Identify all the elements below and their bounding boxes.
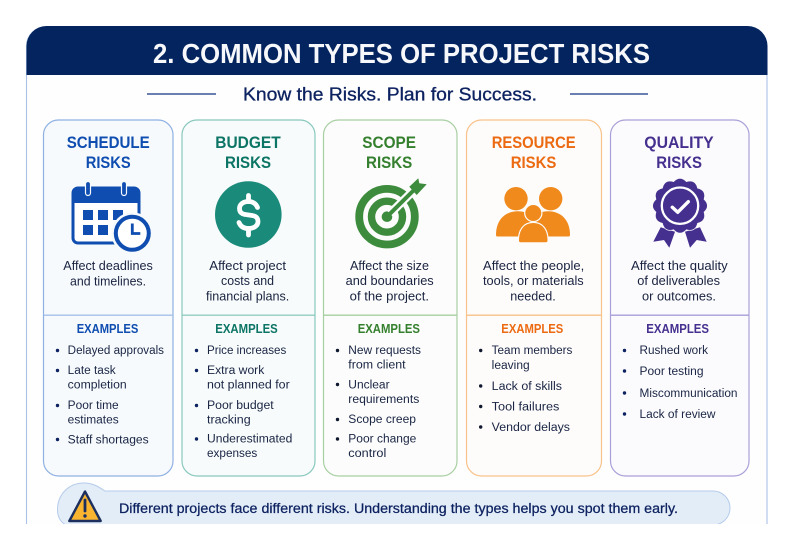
examples list: [479, 345, 573, 434]
description: [63, 259, 153, 289]
icon: calendar with clock: [72, 182, 153, 254]
examples list: Unclear: [348, 380, 390, 392]
examples list: Poor time: [68, 400, 119, 412]
examples list: Price increases: [207, 345, 287, 357]
heading: [362, 133, 416, 172]
description: [483, 259, 584, 304]
examples list: Poor change: [348, 434, 416, 446]
examples list: Miscommunication: [640, 388, 738, 400]
callout text: Different projects face different risks. Understanding the types helps you spot them early.: [119, 501, 678, 516]
panel: budget risks: [182, 120, 315, 476]
heading: RISKS: [225, 153, 271, 172]
panel: scope risks: [324, 120, 457, 476]
panel: resource risks: [466, 120, 602, 476]
description: [631, 259, 728, 304]
heading: [644, 133, 714, 172]
examples list: Vendor delays: [492, 422, 570, 434]
examples list: [56, 345, 164, 446]
examples list: Late task: [68, 365, 116, 377]
examples list: Poor budget: [207, 400, 275, 412]
description: [206, 259, 289, 304]
description: and boundaries: [346, 274, 434, 288]
examples list: [195, 345, 292, 460]
examples heading: EXAMPLES: [646, 322, 709, 336]
examples list: [336, 345, 421, 460]
description: of the project.: [350, 290, 429, 304]
examples list: requirements: [348, 394, 420, 406]
description: needed.: [510, 290, 556, 304]
description: Affect the people,: [483, 259, 584, 273]
description: costs and: [221, 274, 274, 288]
examples list: leaving: [492, 360, 530, 372]
examples list: Underestimated: [207, 434, 292, 446]
description: tools, or materials: [483, 274, 584, 288]
heading: RISKS: [511, 153, 556, 172]
description: financial plans.: [206, 290, 289, 304]
heading: BUDGET: [215, 133, 281, 152]
description: [346, 259, 434, 304]
callout: key takeaway: [58, 483, 730, 525]
heading: [215, 133, 281, 172]
examples list: Tool failures: [492, 401, 560, 413]
icon: dollar coin: [215, 181, 282, 248]
panel: quality risks: [610, 120, 749, 476]
examples list: [623, 345, 738, 421]
examples list: from client: [348, 360, 406, 372]
examples heading: EXAMPLES: [358, 322, 420, 336]
examples list: Scope creep: [348, 414, 416, 426]
heading: SCHEDULE: [67, 133, 150, 152]
heading: QUALITY: [644, 133, 714, 152]
description: and timelines.: [70, 275, 146, 289]
heading: RISKS: [656, 153, 702, 172]
icon: warning triangle: [69, 492, 101, 521]
description: Affect project: [209, 259, 287, 273]
examples heading: EXAMPLES: [77, 322, 138, 336]
icon: people group: [496, 187, 570, 242]
examples list: tracking: [207, 414, 251, 426]
description: Affect the size: [350, 259, 429, 273]
description: Affect deadlines: [63, 259, 153, 273]
examples list: estimates: [68, 414, 119, 426]
heading: RISKS: [86, 153, 131, 172]
examples list: Team members: [492, 345, 573, 357]
heading: SCOPE: [362, 133, 416, 152]
examples list: Lack of skills: [492, 381, 562, 393]
examples heading: EXAMPLES: [501, 322, 563, 336]
examples heading: EXAMPLES: [215, 322, 278, 336]
title banner: [26, 26, 768, 75]
panel: schedule risks: [44, 120, 173, 476]
examples list: Extra work: [207, 365, 265, 377]
examples list: New requests: [348, 345, 421, 357]
tagline text: Know the Risks. Plan for Success.: [243, 84, 537, 104]
description: Affect the quality: [631, 259, 728, 273]
examples list: control: [348, 448, 386, 460]
heading: [67, 133, 150, 172]
examples list: completion: [68, 380, 127, 392]
description: of deliverables: [637, 274, 720, 288]
examples list: Staff shortages: [68, 434, 149, 446]
examples list: Rushed work: [640, 345, 708, 357]
heading: RESOURCE: [492, 133, 576, 152]
icon: target with arrow: [359, 178, 427, 244]
examples list: Lack of review: [640, 409, 716, 421]
examples list: not planned for: [207, 380, 290, 392]
examples list: Poor testing: [640, 366, 704, 378]
heading: [492, 133, 576, 172]
icon: award ribbon badge: [653, 179, 707, 248]
heading: RISKS: [366, 153, 412, 172]
title: 2. COMMON TYPES OF PROJECT RISKS: [153, 38, 650, 69]
description: or outcomes.: [642, 290, 716, 304]
examples list: expenses: [207, 448, 258, 460]
examples list: Delayed approvals: [68, 345, 164, 357]
